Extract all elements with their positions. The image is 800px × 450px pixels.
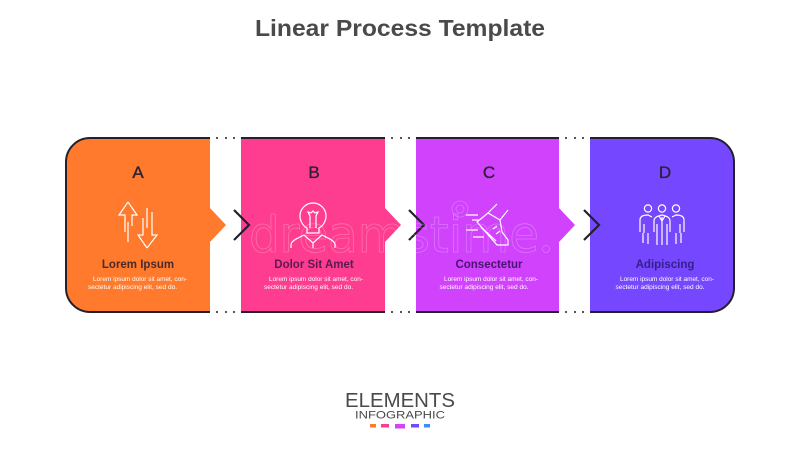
panel: A: sectetur adipiscing elit, sed do.: [88, 284, 177, 291]
panel: D: [590, 138, 734, 312]
icon: three people: [640, 205, 684, 245]
letter C: C: [483, 163, 495, 182]
title: Linear Process Template: [255, 15, 545, 41]
description: Lorem ipsum dolor sit amet, con-: [269, 276, 363, 283]
icon: running shoe: [466, 204, 508, 245]
letter B: B: [308, 163, 320, 182]
logo wordmark: ELEMENTS: [345, 390, 455, 412]
panel: A: [66, 138, 226, 312]
watermark: dreamstime: [249, 206, 539, 264]
letter A: A: [132, 163, 144, 182]
letter D: D: [659, 163, 671, 182]
panel: C: sectetur adipiscing elit, sed do.: [440, 284, 529, 291]
icon: up and down arrows: [119, 202, 157, 248]
dotted connectors: [216, 137, 584, 313]
logo subtitle: INFOGRAPHIC: [355, 410, 445, 422]
panel: C: [416, 138, 575, 312]
panel: D: sectetur adipiscing elit, sed do.: [616, 284, 705, 291]
label: Dolor Sit Amet: [274, 259, 354, 271]
description: Lorem ipsum dolor sit amet, con-: [444, 276, 538, 283]
chevron arrows: [234, 210, 599, 240]
label: Adipiscing: [636, 259, 694, 271]
logo colour swatches: [370, 424, 430, 428]
label: Consectetur: [455, 259, 523, 271]
label: Lorem Ipsum: [102, 259, 174, 271]
panel: B: [241, 138, 401, 312]
logo: [345, 390, 455, 428]
panel: B: sectetur adipiscing elit, sed do.: [264, 284, 353, 291]
description: Lorem ipsum dolor sit amet, con-: [620, 276, 714, 283]
icon: light bulb person: [291, 203, 335, 248]
description: Lorem ipsum dolor sit amet, con-: [93, 276, 187, 283]
